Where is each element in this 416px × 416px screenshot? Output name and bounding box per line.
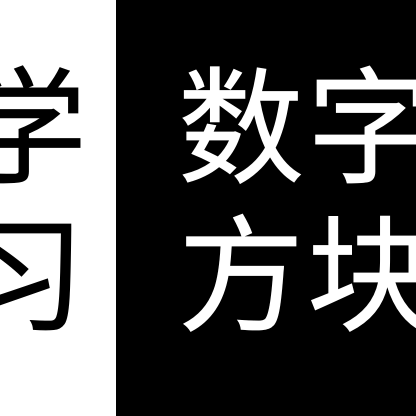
panel: white left column xyxy=(0,0,116,416)
